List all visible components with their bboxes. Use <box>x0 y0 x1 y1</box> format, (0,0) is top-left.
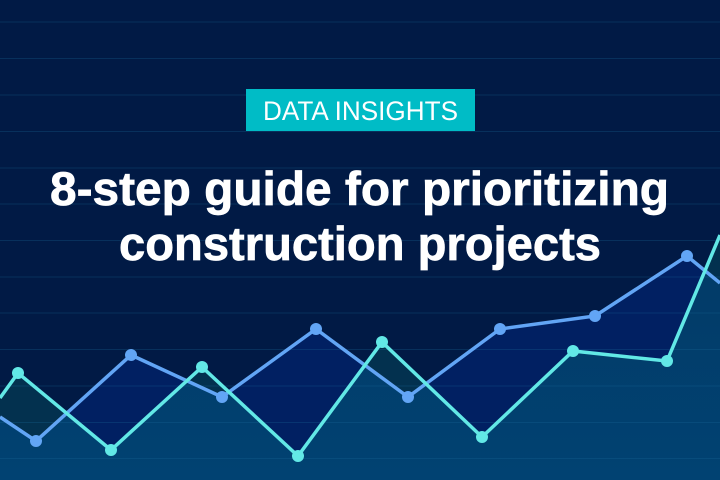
blue series area <box>0 256 720 480</box>
title: 8-step guide for prioritizing <box>50 162 669 215</box>
tag: data insights: DATA INSIGHTS <box>263 96 458 126</box>
blue series line <box>0 250 720 447</box>
title: construction projects <box>119 217 601 270</box>
cyan series area <box>0 235 720 480</box>
cyan series line <box>0 235 720 462</box>
title <box>50 162 669 270</box>
tag: data insights <box>246 89 475 131</box>
overlap shading <box>0 256 720 480</box>
